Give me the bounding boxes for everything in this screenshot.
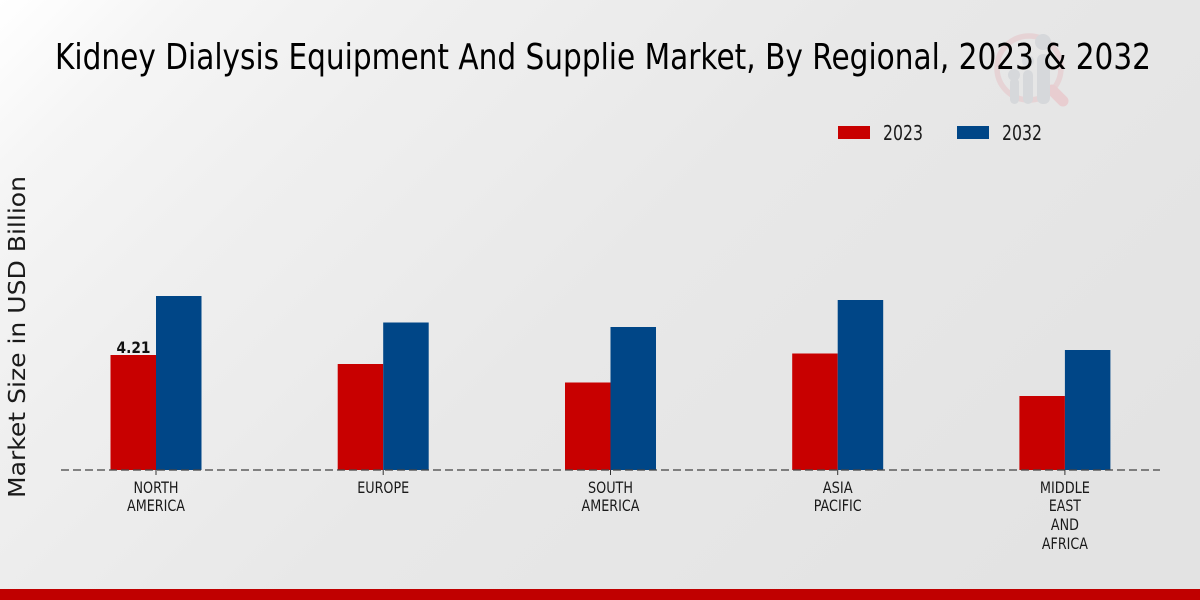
label: Asia Pacific (814, 478, 862, 515)
label: South America: AMERICA (582, 496, 640, 515)
label: Asia Pacific: ASIA (823, 478, 853, 497)
legend: 2023 (838, 121, 923, 145)
region: Europe bars (338, 322, 429, 470)
label: Middle East and Africa: MIDDLE (1040, 478, 1090, 497)
region: Middle East and Africa bars (1019, 350, 1110, 470)
region: North America bars (110, 296, 202, 470)
region: Asia Pacific bars (792, 300, 883, 470)
label: North America: NORTH (134, 478, 178, 497)
label: North America: AMERICA (127, 496, 185, 515)
legend: 2032 (957, 121, 1042, 145)
data label: 4.21: 4.21 (116, 338, 150, 357)
region: South America bars (565, 327, 656, 470)
label: South America (582, 478, 640, 515)
bottom bar (0, 589, 1200, 600)
legend: 2023: 2023 (883, 121, 923, 145)
y-axis label: Market Size in USD Billion (5, 176, 31, 498)
label: North America (127, 478, 185, 515)
label: South America: SOUTH (588, 478, 633, 497)
label: Asia Pacific: PACIFIC (814, 496, 862, 515)
label: Middle East and Africa: AND (1051, 515, 1079, 534)
label: Middle East and Africa: AFRICA (1042, 534, 1088, 553)
icon: watermark logo (997, 34, 1063, 104)
x-axis labels (127, 478, 1090, 553)
legend (838, 121, 1042, 145)
label: Europe: EUROPE (357, 478, 409, 497)
label: Middle East and Africa: EAST (1049, 496, 1081, 515)
label: Middle East and Africa (1040, 478, 1090, 553)
legend: 2032: 2032 (1002, 121, 1042, 145)
bar chart (61, 296, 1160, 475)
